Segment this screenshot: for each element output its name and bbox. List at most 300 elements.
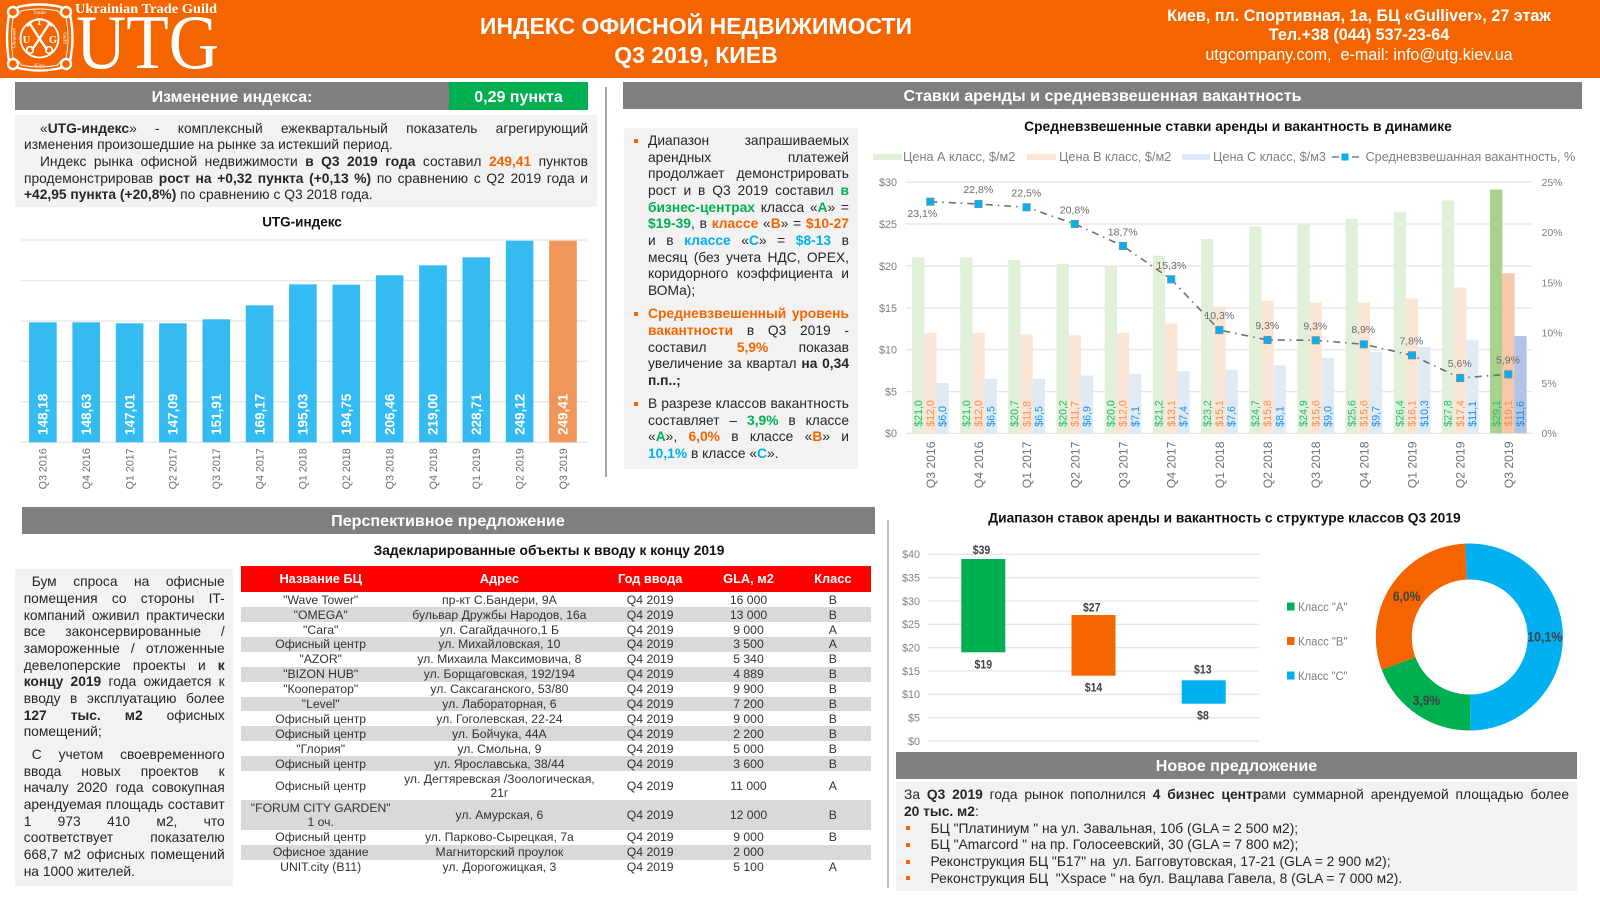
legend: classes: Класс "А": [1298, 602, 1348, 614]
floating bar chart: rent ranges by class: $39: [973, 543, 991, 557]
table: declared office projects: 12 000: [730, 808, 767, 822]
table: declared office projects: "Кооператор": [283, 682, 358, 696]
table: declared office projects: B: [829, 808, 837, 822]
bar groups: $24,9: [1298, 400, 1310, 427]
text block: supply commentary: соответствует показателю: [24, 830, 225, 845]
bar groups: $21,0: [913, 400, 925, 427]
floating bar chart: rent ranges by class: $8: [1197, 708, 1209, 722]
bar groups: $21,0: [961, 400, 973, 427]
bar chart: UTG index: Q3 2018: [384, 448, 396, 489]
bar chart: UTG index: 194,75: [339, 393, 354, 435]
table: declared office projects: "FORUM CITY GARDEN": [251, 801, 391, 815]
table: declared office projects: Офисный центр: [275, 637, 366, 651]
text block: supply commentary: девелоперские проекты и к: [24, 658, 225, 673]
list lines: Реконструкция БЦ "Б17" на ул. Багговутовская, 17-21 (GLA = 2 900 м2);: [930, 854, 1391, 869]
chart title: rates range and vacancy by class: Диапазон ставок аренды и вакантность с структуре классов Q3 2019: [988, 510, 1461, 526]
bar groups: $11,7: [1070, 401, 1082, 427]
table: declared office projects: ул. Ярославська, 38/44: [434, 757, 565, 771]
table: declared office projects: Q4 2019: [627, 637, 674, 651]
floating bar chart: rent ranges by class: [902, 543, 1259, 748]
bar groups: $12,0: [973, 400, 985, 427]
table: declared office projects: ул. Дегтяревская /Зоологическая,: [404, 772, 595, 786]
floating bar chart: rent ranges by class: $20: [902, 642, 920, 654]
table: declared office projects: B: [829, 830, 837, 844]
commentary lines: продолжает демонстрировать: [648, 166, 849, 181]
heading: rent rates and vacancy: Ставки аренды и средневзвешенная вакантность: [903, 87, 1302, 105]
bar groups: $9,0: [1323, 406, 1335, 427]
table: declared office projects: ул. Гоголевская, 22-24: [436, 712, 562, 726]
text block: supply commentary: 668,7 м2 офисных помещений: [24, 847, 225, 862]
x axis labels: Q2 2017: [1068, 441, 1082, 488]
commentary lines: «А», 6,0% в классе «В» и: [648, 429, 849, 444]
heading: upcoming supply: Перспективное предложение: [331, 512, 565, 530]
x axis labels: Q4 2018: [1357, 441, 1371, 488]
text block: UTG index description: [15, 115, 597, 207]
table: declared office projects: B: [829, 727, 837, 741]
bar chart: UTG index: Q4 2017: [254, 448, 266, 489]
combo chart: rent rates and vacancy dynamics: $20: [879, 261, 897, 273]
bar chart: UTG index: 148,63: [79, 393, 94, 435]
bar groups: $11,6: [1515, 401, 1527, 427]
commentary lines: ВОМа);: [648, 283, 695, 298]
bullet: [634, 312, 638, 316]
bar groups: $24,7: [1250, 400, 1262, 427]
table: declared office projects: 7 200: [733, 697, 764, 711]
table: declared office projects: Адрес: [480, 571, 519, 586]
bar groups: $15,8: [1262, 400, 1274, 427]
floating bar chart: rent ranges by class: $27: [1083, 600, 1101, 614]
bar chart: UTG index: Q3 2019: [558, 448, 570, 489]
bar groups: $29,1: [1491, 400, 1503, 427]
table: declared office projects: Офисный центр: [275, 757, 366, 771]
bar groups: $26,4: [1394, 400, 1406, 427]
floating bar chart: rent ranges by class: $10: [902, 689, 920, 701]
title: ИНДЕКС ОФИСНОЙ НЕДВИЖИМОСТИ: [480, 13, 912, 39]
x axis labels: Q1 2018: [1213, 441, 1227, 488]
floating bar chart: rent ranges by class: $5: [908, 712, 920, 724]
floating bar chart: rent ranges by class: $30: [902, 596, 920, 608]
logo: UTG emblem and wordmark: G: [49, 35, 57, 46]
vacancy line: 18,7%: [1108, 226, 1138, 238]
bar chart: UTG index: 148,18: [36, 393, 51, 435]
chart title: Средневзвешенные ставки аренды и вакантность в динамике: [1024, 119, 1452, 134]
legend: Цена В класс, $/м2: [1059, 150, 1171, 164]
table: declared office projects: "OMEGA": [294, 608, 348, 622]
bar chart: UTG index: 219,00: [426, 394, 441, 435]
combo chart: rent rates and vacancy dynamics: 20%: [1542, 227, 1563, 239]
table: declared office projects: ул. Парково-Сырецкая, 7а: [425, 830, 574, 844]
commentary lines: рост и в Q3 2019 составил в: [648, 183, 849, 198]
heading: rent rates and vacancy: [623, 82, 1582, 109]
table: declared office projects: Q4 2019: [627, 682, 674, 696]
x axis labels: Q2 2019: [1454, 441, 1468, 488]
donut chart: vacancy by class: 6,0%: [1393, 589, 1420, 604]
floating bar chart: rent ranges by class: $0: [908, 736, 920, 748]
commentary lines: В разрезе классов вакантность: [648, 396, 849, 411]
bar chart: UTG index: [21, 214, 587, 489]
commentary lines: составил 5,9% показав: [648, 340, 849, 355]
table: declared office projects: ул. Амурская, 6: [456, 808, 543, 822]
vacancy line: 5,9%: [1496, 354, 1520, 366]
callout: index change value: 0,29 пункта: [474, 89, 563, 106]
table: declared office projects: 21г: [490, 786, 508, 800]
combo chart: rent rates and vacancy dynamics: 10%: [1542, 328, 1563, 340]
table: declared office projects: Q4 2019: [627, 742, 674, 756]
combo chart: rent rates and vacancy dynamics: 5%: [1542, 378, 1557, 390]
table: declared office projects: B: [829, 682, 837, 696]
bar groups: $6,5: [985, 406, 997, 427]
commentary lines: увеличение за квартал на 0,34: [648, 356, 849, 371]
table: declared office projects: UNIT.city (B11): [280, 860, 361, 874]
table: declared office projects: ул. Сагайдачного,1 Б: [440, 623, 559, 637]
text block: supply commentary: на 1000 жителей.: [24, 864, 135, 879]
table: declared office projects: ул. Бойчука, 44А: [452, 727, 547, 741]
combo chart: rent rates and vacancy dynamics: $0: [885, 428, 897, 440]
bar chart: UTG index: 147,01: [122, 393, 137, 435]
logo: UTG emblem and wordmark: T: [36, 17, 43, 28]
x axis labels: Q3 2016: [924, 441, 938, 488]
logo: UTG emblem and wordmark: Ukrainian: [12, 28, 18, 48]
commentary lines: Диапазон запрашиваемых: [648, 133, 849, 148]
bar chart: UTG index: 147,09: [166, 394, 181, 435]
bar chart: UTG index: Q3 2016: [38, 448, 50, 489]
table: declared office projects: A: [829, 637, 837, 651]
bar groups: $17,4: [1455, 400, 1467, 427]
table: declared office projects: ул. Смольна, 9: [457, 742, 541, 756]
table: declared office projects: B: [829, 593, 837, 607]
floating bar chart: rent ranges by class: $14: [1085, 680, 1103, 694]
bar chart: UTG index: Q3 2017: [211, 448, 223, 489]
commentary lines: Средневзвешенный уровень: [648, 306, 849, 321]
table: declared office projects: Q4 2019: [627, 845, 674, 859]
floating bar chart: rent ranges by class: $19: [975, 658, 992, 672]
table: declared office projects: B: [829, 697, 837, 711]
list lines: [904, 787, 1569, 886]
commentary lines: 10,1% в классе «С».: [648, 446, 778, 461]
logo: UTG emblem and wordmark: Kiev: [34, 63, 45, 69]
bar chart: UTG index: Q1 2019: [471, 448, 483, 489]
bar groups: $7,1: [1130, 406, 1142, 427]
table: declared office projects: 9 900: [733, 682, 764, 696]
text block: supply commentary: помещений;: [24, 724, 102, 739]
bar groups: $6,0: [937, 406, 949, 427]
bar groups: $15,6: [1358, 400, 1370, 427]
bar groups: $7,6: [1226, 406, 1238, 427]
vacancy line: 20,8%: [1060, 204, 1090, 216]
bar chart: UTG index: Q1 2017: [124, 448, 136, 489]
combo chart: rent rates and vacancy dynamics: $25: [879, 219, 897, 231]
table: declared office projects: Q4 2019: [627, 593, 674, 607]
table: declared office projects: Q4 2019: [627, 608, 674, 622]
commentary lines: коридорного коэффициента и: [648, 266, 849, 281]
x axis labels: Q2 2018: [1261, 441, 1275, 488]
commentary lines: п.п..;: [648, 373, 681, 388]
combo chart: rent rates and vacancy dynamics: $10: [879, 344, 897, 356]
table: declared office projects: "AZOR": [299, 652, 342, 666]
table: declared office projects: B: [829, 652, 837, 666]
logo: UTG emblem and wordmark: U: [23, 35, 31, 46]
table: declared office projects: Магниторский проулок: [436, 845, 563, 859]
combo chart: rent rates and vacancy dynamics: $5: [885, 386, 897, 398]
bar groups: $19,1: [1503, 400, 1515, 427]
bar chart: UTG index: UTG-индекс: [262, 214, 342, 230]
bar groups: $12,0: [1118, 400, 1130, 427]
bar chart: UTG index: Q2 2017: [168, 448, 180, 489]
bar groups: $25,6: [1346, 400, 1358, 427]
x axis labels: [924, 441, 1516, 488]
bar chart: UTG index: 249,12: [512, 394, 527, 435]
commentary lines: и в классе «С» = $8-13 в: [648, 233, 849, 248]
contact details: Киев, пл. Спортивная, 1а, БЦ «Gulliver», 27 этаж: [1167, 7, 1551, 25]
commentary lines: вакантности в Q3 2019 -: [648, 323, 849, 338]
table: declared office projects: "BIZON HUB": [283, 667, 358, 681]
table: declared office projects: Q4 2019: [627, 623, 674, 637]
table: declared office projects: B: [829, 667, 837, 681]
table: declared office projects: 4 889: [733, 667, 764, 681]
logo: UTG emblem and wordmark: Trade: [33, 10, 46, 16]
table: declared office projects: Q4 2019: [627, 667, 674, 681]
bar chart: UTG index: Q2 2019: [514, 448, 526, 489]
table: declared office projects: Q4 2019: [627, 757, 674, 771]
bar groups: $20,2: [1057, 400, 1069, 427]
table title: Задекларированные объекты к вводу к концу 2019: [374, 542, 724, 558]
floating bar chart: rent ranges by class: $13: [1194, 662, 1212, 676]
x axis labels: Q1 2017: [1020, 441, 1034, 488]
table: declared office projects: 13 000: [730, 608, 767, 622]
bar chart: UTG index: 206,46: [382, 393, 397, 435]
text block: supply commentary: концу 2019 года ожидается к: [24, 674, 225, 689]
bar groups: $7,4: [1178, 406, 1190, 427]
text block: supply commentary: арендуемая площадь составит: [24, 797, 225, 812]
table: declared office projects: ул. Лабораторная, 6: [442, 697, 556, 711]
table: declared office projects: 2 000: [733, 845, 764, 859]
text block: supply commentary: вводу в эксплуатацию более: [24, 691, 225, 706]
bar groups: $15,6: [1310, 400, 1322, 427]
table: declared office projects: ул. Михайловская, 10: [438, 637, 560, 651]
legend: Цена С класс, $/м3: [1213, 150, 1326, 164]
table: declared office projects: бульвар Дружбы Народов, 16а: [412, 608, 586, 622]
heading: new supply: Новое предложение: [1156, 757, 1317, 775]
floating bar chart: rent ranges by class: $35: [902, 572, 920, 584]
bar groups: $11,8: [1021, 401, 1033, 427]
table: declared office projects: Q4 2019: [627, 697, 674, 711]
table: declared office projects: 11 000: [730, 779, 767, 793]
table: declared office projects: A: [829, 623, 837, 637]
bar chart: UTG index: Q1 2018: [298, 448, 310, 489]
x axis labels: Q3 2018: [1309, 441, 1323, 488]
table: declared office projects: 1 оч.: [307, 815, 334, 829]
vacancy line: 22,8%: [963, 184, 993, 196]
x axis labels: Q3 2019: [1502, 441, 1516, 488]
table: declared office projects: Офисный центр: [275, 727, 366, 741]
heading: upcoming supply: [22, 507, 874, 534]
legend: [873, 150, 1575, 164]
text block: supply commentary: все законсервированные /: [24, 624, 225, 639]
text block: UTG index description: +42,95 пункта (+20,8%) по сравнению с Q3 2018 года.: [24, 187, 373, 202]
title: Q3 2019, КИЕВ: [614, 42, 778, 68]
combo chart: rent rates and vacancy dynamics: $30: [879, 177, 897, 189]
bar groups: $10,3: [1419, 400, 1431, 427]
commentary lines: [648, 133, 849, 461]
table: declared office projects: A: [829, 779, 837, 793]
bar chart: UTG index: 228,71: [469, 393, 484, 435]
bar chart: UTG index: 249,41: [556, 393, 571, 435]
text block: UTG index description: продемонстрировав рост на +0,32 пункта (+0,13 %) по сравнению с Q2 2019 года и: [24, 171, 588, 186]
bar groups: $12,0: [925, 400, 937, 427]
text block: supply commentary: Бум спроса на офисные: [32, 574, 225, 589]
text block: UTG index description: Индекс рынка офисной недвижимости в Q3 2019 года составил 249,41 пунктов: [40, 154, 588, 169]
vacancy line: 9,3%: [1255, 320, 1279, 332]
table: declared office projects: Q4 2019: [627, 779, 674, 793]
table: declared office projects: B: [829, 742, 837, 756]
table: declared office projects: "Сага": [303, 623, 338, 637]
bullet: [906, 876, 910, 880]
bar groups: $21,2: [1154, 400, 1166, 427]
commentary lines: арендных платежей: [648, 150, 849, 165]
logo: UTG emblem and wordmark: Ukrainian Trade Guild: [75, 2, 217, 17]
bar chart: UTG index: Q2 2018: [341, 448, 353, 489]
text block: UTG index description: изменения произошедшие на рынке за истекший период.: [24, 137, 393, 152]
legend: classes: Класс "В": [1298, 636, 1348, 648]
table: declared office projects: ул. Борщаговская, 192/194: [424, 667, 575, 681]
logo: UTG emblem and wordmark: Guild: [62, 32, 66, 44]
table: declared office projects: Название БЦ: [279, 571, 362, 586]
legend: classes: Класс "С": [1298, 671, 1348, 683]
list lines: За Q3 2019 года рынок пополнился 4 бизнес центрами суммарной арендуемой площадью более: [904, 787, 1569, 802]
table: declared office projects: Q4 2019: [627, 860, 674, 874]
bullet: [906, 843, 910, 847]
table: declared office projects: ул. Дорогожицкая, 3: [443, 860, 556, 874]
bar groups: [912, 189, 1527, 433]
bar chart: UTG index: 195,03: [296, 393, 311, 435]
text block: supply commentary: 127 тыс. м2 офисных: [24, 708, 225, 723]
bullet: [906, 826, 910, 830]
bar groups: $6,9: [1082, 406, 1094, 427]
table: declared office projects: ул. Саксаганского, 53/80: [430, 682, 568, 696]
table: declared office projects: пр-кт С.Бандери, 9А: [442, 593, 557, 607]
table: declared office projects: 9 000: [733, 830, 764, 844]
table: declared office projects: 9 000: [733, 712, 764, 726]
combo chart: rent rates and vacancy dynamics: 0%: [1542, 428, 1557, 440]
text block: rent and vacancy commentary: [624, 128, 858, 469]
bar groups: $8,1: [1274, 406, 1286, 427]
title: [480, 13, 912, 68]
bar chart: UTG index: 169,17: [252, 394, 267, 435]
table: declared office projects: Офисный центр: [275, 830, 366, 844]
divider: [605, 87, 606, 477]
table: declared office projects: "Глория": [296, 742, 345, 756]
bar groups: $11,1: [1467, 401, 1479, 427]
vacancy line: 15,3%: [1156, 260, 1186, 272]
vacancy line: [907, 184, 1520, 382]
list lines: БЦ "Amarcord " на пр. Голосеевский, 30 (GLA = 7 800 м2);: [930, 837, 1298, 852]
vacancy line: 9,3%: [1303, 320, 1327, 332]
bar groups: $13,1: [1166, 400, 1178, 427]
contact details: Тел.+38 (044) 537-23-64: [1269, 26, 1449, 44]
table: declared office projects: Q4 2019: [627, 712, 674, 726]
combo chart: rent rates and vacancy dynamics: $15: [879, 303, 897, 315]
commentary lines: $19-39, в классе «В» = $10-27: [648, 216, 849, 231]
bar groups: $27,8: [1443, 400, 1455, 427]
list lines: БЦ "Платиниум " на ул. Завальная, 10б (GLA = 2 500 м2);: [930, 821, 1298, 836]
text block: UTG index description: «UTG-индекс» - комплексный ежеквартальный показатель агрегирующий: [40, 121, 588, 136]
legend: classes: [1287, 602, 1348, 683]
bar groups: $20,7: [1009, 400, 1021, 427]
contact details: [1167, 7, 1551, 64]
table: declared office projects: ул. Михаила Максимовича, 8: [417, 652, 581, 666]
table: declared office projects: Класс: [814, 571, 851, 586]
x axis labels: Q3 2017: [1116, 441, 1130, 488]
table: declared office projects: B: [829, 712, 837, 726]
logo: UTG emblem and wordmark: X: [36, 35, 44, 46]
vacancy line: 5,6%: [1448, 358, 1472, 370]
text block: new supply list: [896, 782, 1577, 891]
table: declared office projects: [241, 566, 871, 874]
divider: [887, 520, 888, 888]
contact details: utgcompany.com, e-mail: info@utg.kiev.ua: [1205, 46, 1513, 64]
floating bar chart: rent ranges by class: $40: [902, 549, 920, 561]
bar chart: UTG index: Q4 2016: [81, 448, 93, 489]
bar groups: $15,1: [1214, 400, 1226, 427]
table: declared office projects: 5 000: [733, 742, 764, 756]
commentary lines: месяц (без учета НДС, OPEX,: [648, 250, 849, 265]
table: declared office projects: 3 500: [733, 637, 764, 651]
text block: supply commentary: замороженные / отложенные: [24, 641, 225, 656]
table: declared office projects: Офисный центр: [275, 779, 366, 793]
legend: Средневзвешанная вакантность, %: [1366, 150, 1575, 164]
callout: index change value: [449, 82, 588, 110]
legend: Цена А класс, $/м2: [903, 150, 1015, 164]
bar chart: UTG index: 151,91: [209, 393, 224, 435]
text block: supply commentary: помещения со стороны IT-: [24, 591, 225, 606]
table: declared office projects: GLA, м2: [723, 571, 774, 586]
table: declared office projects: Год ввода: [618, 571, 682, 586]
table: declared office projects: "Wave Tower": [283, 593, 358, 607]
floating bar chart: rent ranges by class: $25: [902, 619, 920, 631]
table: declared office projects: "Level": [302, 697, 340, 711]
commentary lines: бизнес-центрах класса «А» =: [648, 200, 849, 215]
table: declared office projects: Q4 2019: [627, 808, 674, 822]
commentary lines: составляет – 3,9% в классе: [648, 413, 849, 428]
table: declared office projects: A: [829, 860, 837, 874]
vacancy line: 22,5%: [1011, 188, 1041, 200]
donut chart: vacancy by class: 3,9%: [1413, 693, 1440, 708]
vacancy line: 23,1%: [907, 208, 937, 220]
vacancy line: 10,3%: [1204, 310, 1234, 322]
table: declared office projects: B: [829, 608, 837, 622]
bar groups: $23,2: [1202, 400, 1214, 427]
bar groups: $20,0: [1105, 400, 1117, 427]
x axis labels: Q4 2016: [972, 441, 986, 488]
donut chart: vacancy by class: [1376, 544, 1563, 731]
vacancy line: 8,9%: [1351, 324, 1375, 336]
table: declared office projects: Q4 2019: [627, 652, 674, 666]
floating bar chart: rent ranges by class: $15: [902, 666, 920, 678]
heading: index change: [15, 82, 449, 110]
combo chart: rent rates and vacancy dynamics: 25%: [1542, 177, 1563, 189]
table: declared office projects: Офисное здание: [273, 845, 368, 859]
combo chart: rent rates and vacancy dynamics: [873, 119, 1575, 488]
table: declared office projects: Q4 2019: [627, 727, 674, 741]
header band: [0, 0, 1600, 78]
table: declared office projects: 2 200: [733, 727, 764, 741]
text block: supply commentary: началу 2020 года совокупная: [24, 780, 225, 795]
text block: supply commentary: компаний оживил практически: [24, 608, 225, 623]
table: declared office projects: Q4 2019: [627, 830, 674, 844]
bullet: [634, 139, 638, 143]
text block: supply commentary: ввода новых проектов к: [24, 764, 225, 779]
bar groups: $6,5: [1033, 406, 1045, 427]
